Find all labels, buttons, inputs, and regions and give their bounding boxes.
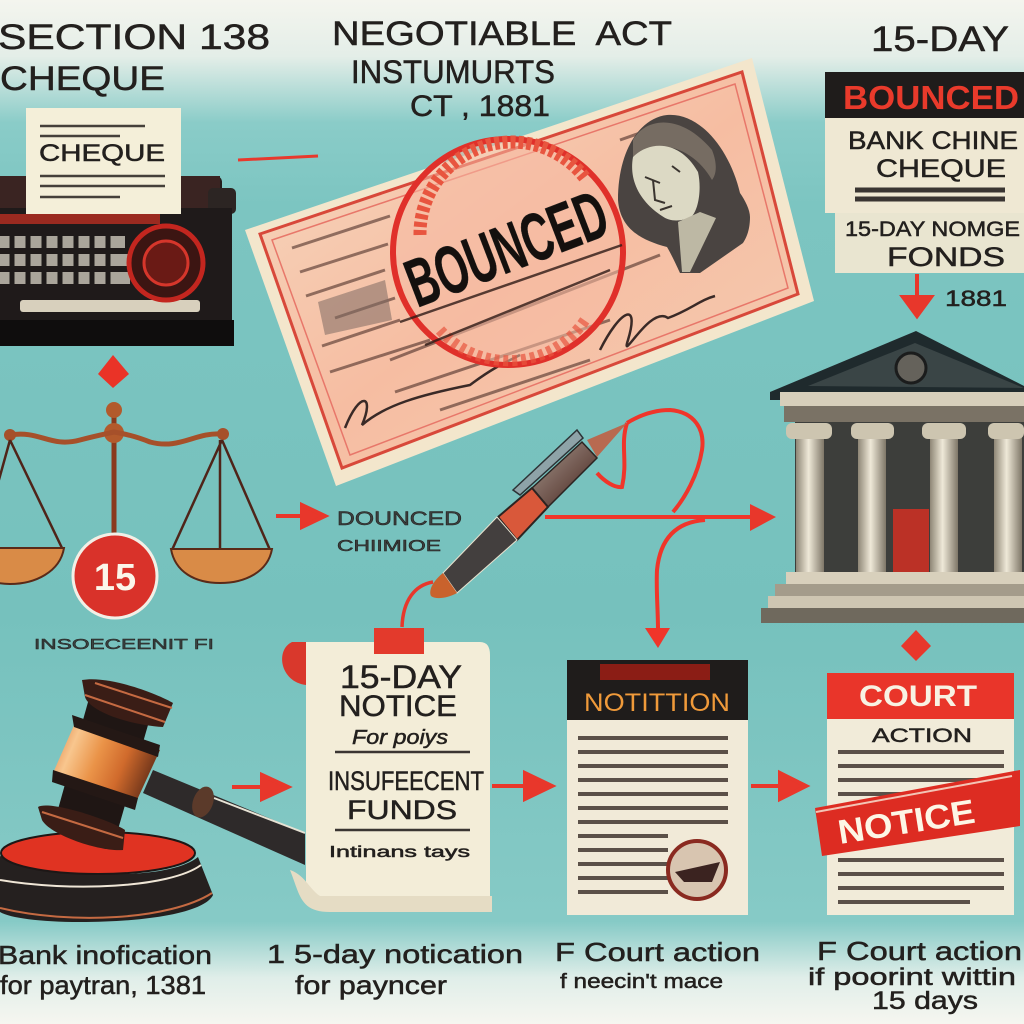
caption: court action: F Court action — [555, 937, 760, 967]
caption: court action within 15 days: 15 days — [872, 987, 978, 1015]
caption: court action within 15 days — [808, 936, 1022, 1015]
lower signature — [345, 355, 520, 428]
notification document — [567, 660, 748, 915]
badge: 15: 15 — [94, 557, 136, 599]
seal — [668, 841, 726, 899]
caption: 15-day notification: for payncer — [295, 970, 447, 1000]
icon: scales — [0, 402, 272, 584]
cheque lines — [292, 133, 660, 410]
notice scroll: 15-day notice: FUNDS — [347, 795, 457, 825]
label: bounced cheque — [337, 509, 462, 555]
title: negotiable act: NEGOTIABLE ACT — [332, 15, 672, 53]
cheque sheet — [26, 108, 181, 214]
smudge — [318, 280, 392, 335]
notice scroll: 15-day notice: Intinans tays — [329, 844, 470, 861]
notice scroll: 15-day notice: NOTICE — [339, 690, 457, 723]
label: bounced cheque: CHIIMIOE — [337, 538, 441, 555]
arrowhead: to notification — [645, 628, 670, 648]
arrow: pen flourish into court — [545, 410, 750, 630]
icon: court building — [761, 331, 1024, 623]
badge: 15 — [73, 534, 157, 618]
portrait — [618, 115, 750, 273]
cheque sheet: CHEQUE — [39, 140, 165, 167]
cheque document — [245, 58, 814, 486]
court action notice: ACTION — [872, 726, 972, 747]
label: bounced cheque: DOUNCED — [337, 509, 462, 530]
icon: pen — [430, 423, 627, 598]
arrow: up diamond — [98, 355, 129, 388]
caption: court action — [555, 937, 760, 993]
icon: typewriter with cheque — [0, 108, 236, 346]
arrow: notification to court action — [751, 773, 806, 799]
title: act 1881: CT , 1881 — [410, 90, 550, 123]
columns — [786, 423, 1024, 572]
arrow: notice to notification — [492, 773, 552, 799]
red stamp — [129, 226, 203, 300]
icon: gavel — [0, 679, 305, 922]
gavel base — [0, 832, 213, 922]
arrow: thin line to cheque — [238, 156, 318, 160]
right red card: bounced notice — [825, 72, 1024, 273]
gavel handle — [143, 770, 305, 865]
title: section 138: SECTION 138 — [0, 18, 270, 57]
arrowhead: to court — [750, 504, 776, 531]
right red card: bounced notice: FONDS — [887, 242, 1005, 272]
label: insufficient funds: INSOECEENIT FI — [34, 636, 214, 653]
right red card: bounced notice: CHEQUE — [876, 155, 1006, 183]
gavel head — [55, 695, 150, 840]
caption: 15-day notification: 1 5-day notication — [267, 939, 523, 969]
caption: 15-day notification — [267, 939, 523, 1000]
title: 15-day: 15-DAY — [871, 20, 1009, 59]
ribbon: notice — [815, 770, 1020, 856]
label: 1881: 1881 — [945, 286, 1007, 311]
red clip — [374, 628, 424, 654]
right red card: bounced notice: 15-DAY NOMGE — [845, 218, 1020, 241]
caption: court action within 15 days: if poorint wittin — [808, 964, 1016, 991]
ribbon: notice: NOTICE — [835, 793, 978, 852]
court action notice: COURT — [859, 680, 977, 713]
court action notice — [815, 673, 1020, 915]
notification document: NOTITTION — [584, 689, 730, 717]
caption: bank notification: Bank inofication — [0, 940, 212, 970]
stamp: bounced — [393, 139, 623, 365]
caption: court action within 15 days: F Court action — [817, 936, 1022, 966]
notice scroll: 15-day notice — [282, 628, 492, 912]
arrow: down to court — [903, 274, 931, 316]
notice scroll: 15-day notice: 15-DAY — [340, 659, 462, 695]
caption: bank notification: for paytran, 1381 — [0, 970, 206, 1000]
notice scroll: 15-day notice: INSUFEECENT — [328, 766, 484, 796]
caption: court action: f neecin't mace — [560, 971, 723, 993]
notice scroll: 15-day notice: For poiys — [352, 727, 448, 749]
stamp: bounced: BOUNCED — [395, 176, 618, 322]
right red card: bounced notice: BANK CHINE — [848, 127, 1018, 155]
keyboard — [0, 236, 130, 284]
signature — [600, 296, 715, 350]
arrow: pen to notice — [402, 582, 433, 627]
arrow: notice left — [232, 775, 288, 799]
title: cheque: CHEQUE — [0, 60, 165, 98]
caption: bank notification — [0, 940, 212, 1000]
right red card: bounced notice: BOUNCED — [843, 79, 1019, 116]
title: instruments: INSTUMURTS — [351, 54, 555, 90]
arrow: court to court action — [901, 630, 931, 661]
arrow: to bounced label — [276, 505, 325, 527]
